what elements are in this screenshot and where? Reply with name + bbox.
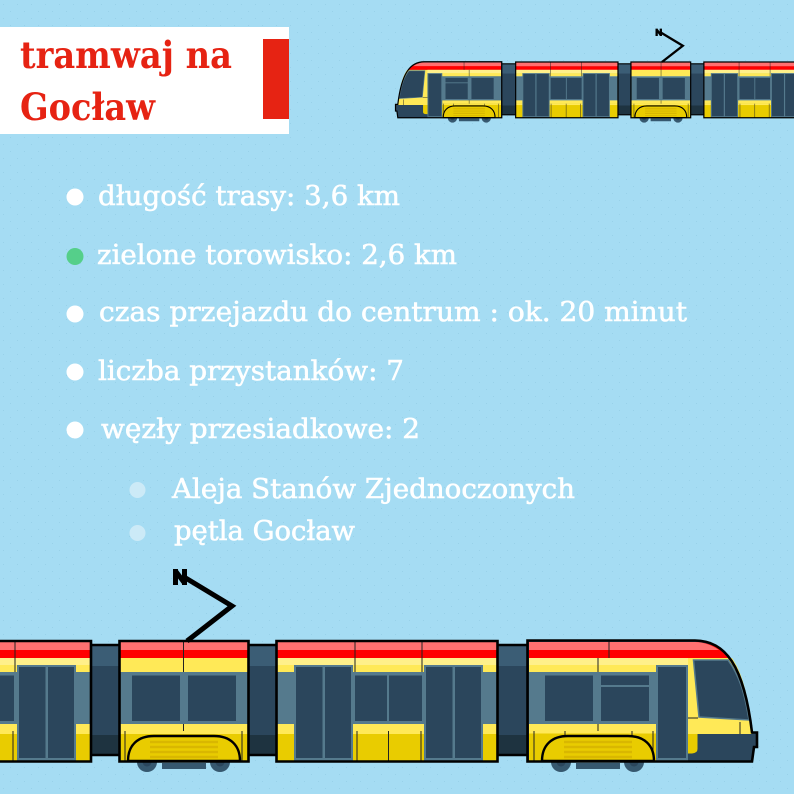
interchange: Aleja Stanów Zjednoczonych: Aleja Stanów Zjednoczonych [171, 474, 575, 505]
fact: interchanges: węzły przesiadkowe: 2 [101, 414, 420, 445]
small tram illustration [396, 29, 794, 123]
fact: travel time: czas przejazdu do centrum : ok. 20 minut [99, 297, 687, 328]
facts list [66, 181, 687, 547]
fact: green track: zielone torowisko: 2,6 km [97, 240, 457, 271]
large tram illustration [0, 569, 757, 772]
title: Gocław [20, 85, 156, 129]
title: tramwaj na [20, 33, 232, 77]
fact: stops: liczba przystanków: 7 [98, 356, 404, 387]
title accent bar [263, 39, 289, 119]
interchange: pętla Gocław: pętla Gocław [174, 516, 355, 547]
large tram pantograph [176, 569, 232, 641]
fact: route length: długość trasy: 3,6 km [98, 181, 400, 212]
title panel [0, 27, 289, 134]
small tram pantograph [657, 29, 683, 62]
